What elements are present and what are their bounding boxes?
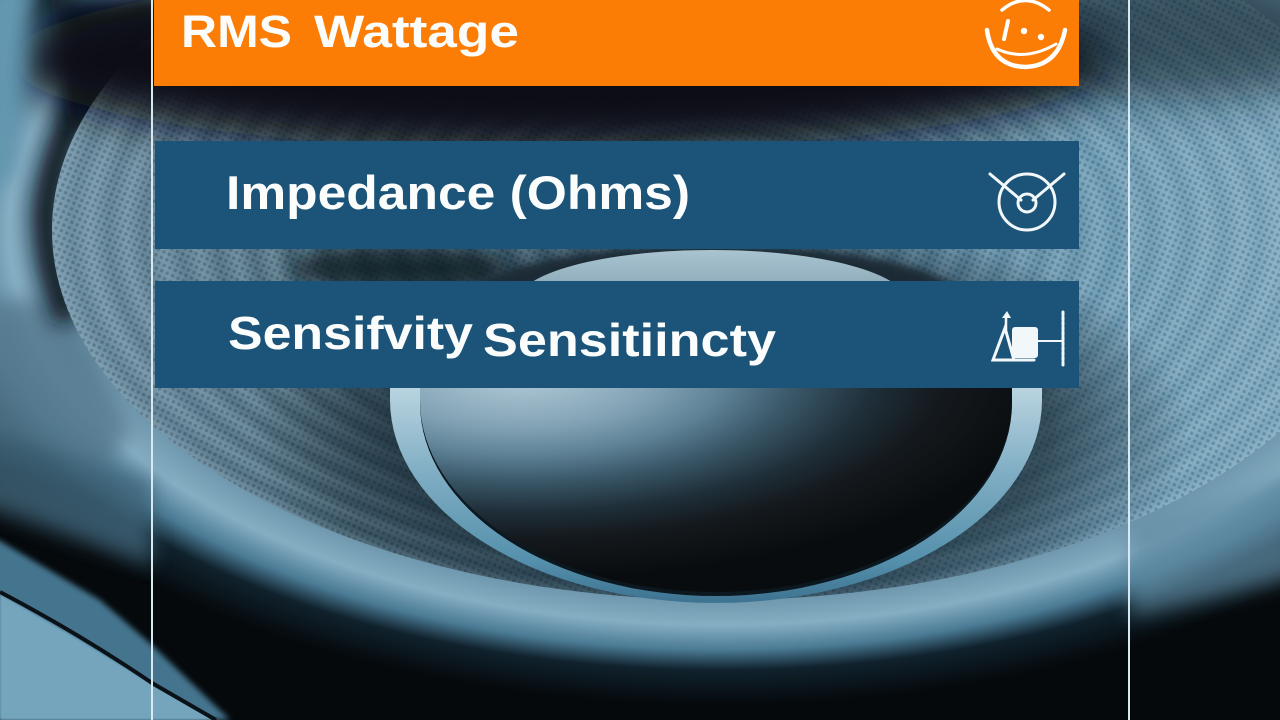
lower left lip <box>0 535 230 720</box>
icon: measuring device <box>993 311 1063 366</box>
speaker cap behind panels <box>465 246 965 358</box>
heading: RMS Wattage: RMS <box>181 6 292 57</box>
speaker dome with ring <box>390 388 1042 603</box>
heading: RMS Wattage <box>181 6 519 57</box>
cone mesh <box>52 0 1280 598</box>
vertical frame lines <box>152 0 1129 720</box>
icon: ohm dial <box>990 174 1064 230</box>
top left highlight <box>0 0 38 200</box>
heading: Impedance (Ohms): Impedance (Ohms) <box>226 166 690 219</box>
heading: Sensitivity: Sensifvity <box>228 307 473 359</box>
heading: Sensitiincty: Sensitiincty <box>483 314 776 366</box>
icon: smile gauge <box>987 0 1065 67</box>
panel: Sensitivity <box>155 281 1079 388</box>
panel: Impedance <box>155 141 1079 249</box>
panel: RMS Wattage <box>154 0 1079 86</box>
heading: RMS Wattage: Wattage <box>314 6 519 57</box>
